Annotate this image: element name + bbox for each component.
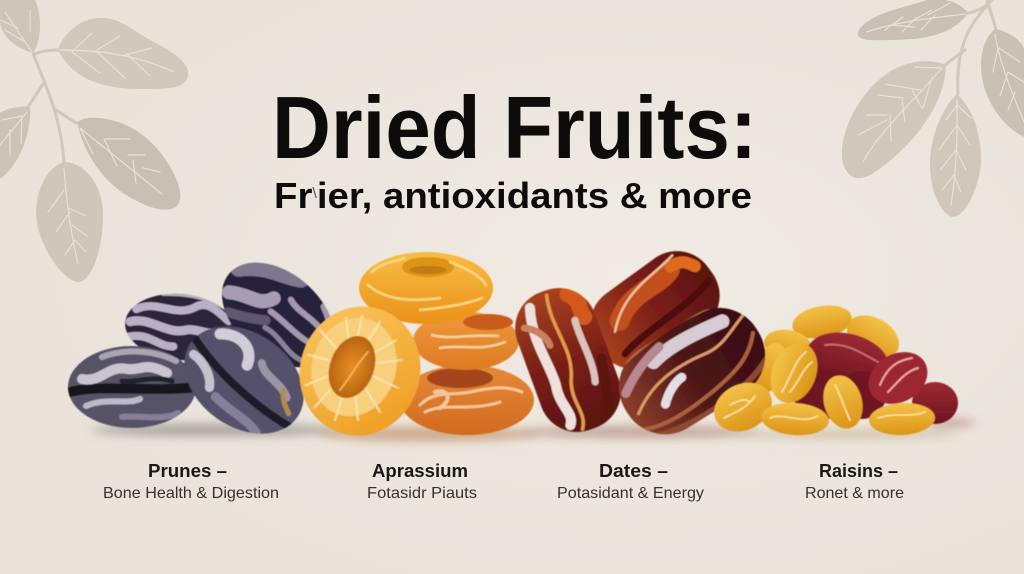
ground shadows	[90, 420, 975, 441]
date: front	[618, 307, 766, 435]
label: prunes: Prunes –	[148, 461, 227, 481]
apricot: front halved	[283, 291, 437, 451]
prunes group	[67, 262, 330, 434]
apricot: top ring	[359, 252, 493, 324]
date: left	[514, 287, 621, 433]
apricot: bottom	[400, 365, 534, 435]
label: raisins	[805, 461, 904, 502]
prune: front right	[184, 326, 304, 434]
label: dates	[557, 461, 704, 502]
subtitle: ier, antioxidants & more	[317, 175, 752, 216]
label: raisins: Raisins –	[819, 461, 898, 481]
raisins group	[706, 324, 958, 441]
title: Dried Fruits:	[272, 78, 757, 177]
raisins: back golden behind dates	[747, 301, 907, 398]
subtitle: \	[312, 185, 318, 202]
label: prunes: Bone Health & Digestion	[103, 485, 279, 502]
botanical leaves: top right	[842, 0, 1024, 217]
subtitle: Fr	[274, 175, 310, 216]
label: aprassium: Aprassium	[372, 461, 468, 481]
date: back	[592, 250, 720, 368]
label: aprassium: Fotasidr Piauts	[367, 485, 477, 502]
label: dates: Dates –	[599, 461, 668, 481]
prune: back right	[221, 262, 330, 368]
prune: front left	[66, 346, 198, 428]
prune: back left	[124, 293, 234, 361]
apricot: middle	[413, 312, 519, 370]
label: prunes	[103, 461, 279, 502]
label: aprassium	[367, 461, 477, 502]
raisins: red	[793, 324, 958, 424]
raisins: front golden	[706, 336, 936, 441]
botanical leaves: top left	[0, 0, 188, 282]
label: dates: Potasidant & Energy	[557, 485, 704, 502]
label: raisins: Ronet & more	[805, 485, 904, 502]
apricots group	[283, 252, 534, 451]
dates group	[514, 250, 766, 435]
